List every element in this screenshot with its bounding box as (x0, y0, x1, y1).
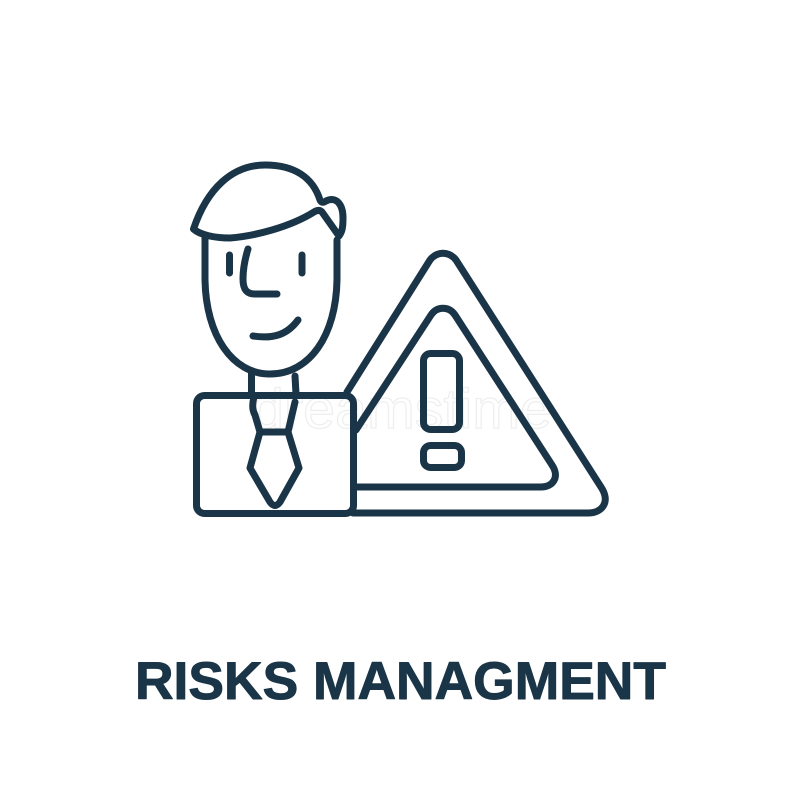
smile (253, 320, 298, 337)
nose (243, 249, 277, 294)
hair (194, 165, 343, 238)
tie knot (253, 397, 295, 432)
icon: man (194, 165, 354, 514)
face outline (205, 238, 337, 374)
watermark: dreamstime (252, 377, 552, 440)
exclamation dot (424, 446, 462, 468)
icon: warning triangle (347, 253, 605, 513)
title: RISKS MANAGMENT (135, 652, 666, 711)
left eye (226, 255, 233, 273)
triangle outer outline (347, 253, 605, 513)
icon: risk manager and warning triangle (194, 165, 605, 514)
triangle inner outline (355, 308, 555, 487)
tie blade (250, 432, 299, 506)
jacket body (196, 396, 354, 514)
right eye (298, 255, 306, 273)
exclamation bar (424, 354, 460, 430)
neck (252, 373, 296, 394)
